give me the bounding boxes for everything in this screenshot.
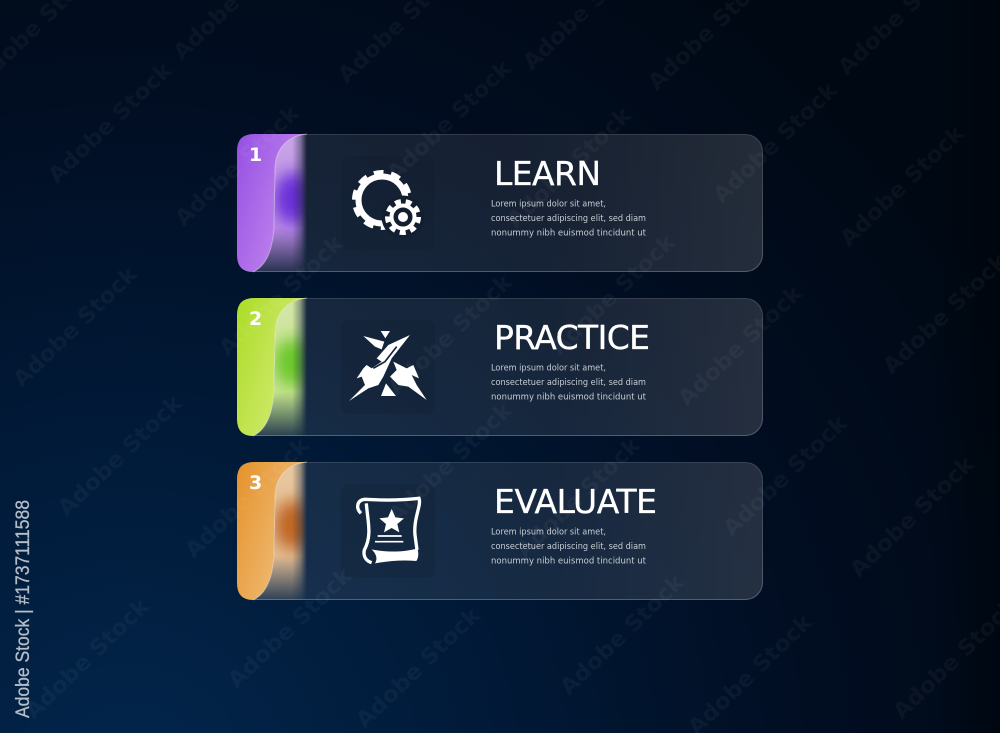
watermarks: Adobe Stock <box>846 451 980 583</box>
watermarks: Adobe Stock <box>21 593 155 725</box>
watermarks: Adobe Stock <box>512 432 646 564</box>
watermarks: Adobe Stock <box>709 77 843 209</box>
watermarks: Adobe Stock <box>383 55 517 187</box>
watermarks: Adobe Stock <box>171 100 305 232</box>
card 3 colour tab <box>237 462 307 600</box>
card 2 glass body <box>238 298 762 436</box>
watermarks: Adobe Stock <box>352 602 486 733</box>
body text 1: nonummy nibh euismod tincidunt ut <box>491 228 646 238</box>
watermarks: Adobe Stock <box>674 280 808 412</box>
heading practice: PRACTICE <box>494 318 650 357</box>
body text 2: Lorem ipsum dolor sit amet, <box>491 364 606 374</box>
card 1 tab edge <box>253 134 307 272</box>
card 2 colour glow <box>254 298 306 436</box>
card 2 tab edge <box>253 298 307 436</box>
card 3 icon tile <box>341 484 435 578</box>
card 1 glass body <box>238 134 762 272</box>
body text 3: nonummy nibh euismod tincidunt ut <box>491 556 646 566</box>
body text 1 <box>491 200 646 238</box>
icon: scroll with star <box>358 498 420 563</box>
number 3: 3 <box>249 472 262 494</box>
body text 1: Lorem ipsum dolor sit amet, <box>491 200 606 210</box>
body text 1: consectetuer adipiscing elit, sed diam <box>491 214 646 224</box>
watermarks: Adobe Stock <box>181 432 315 564</box>
watermarks: Adobe Stock <box>44 57 178 189</box>
number 2: 2 <box>249 308 262 330</box>
number 1: 1 <box>249 144 262 166</box>
body text 3 <box>491 528 646 566</box>
watermarks: Adobe Stock <box>836 120 970 252</box>
watermarks: Adobe Stock <box>384 397 518 529</box>
watermarks: Adobe Stock <box>556 569 690 701</box>
icon: gears <box>355 173 424 238</box>
watermarks: Adobe Stock <box>54 390 188 522</box>
panel: card 3 evaluate <box>237 458 762 604</box>
card 3 colour glow <box>254 462 306 600</box>
card 3 tab edge <box>253 462 307 600</box>
icon: crossed swords <box>349 331 427 401</box>
card 1 colour glow <box>254 134 306 272</box>
watermarks: Adobe Stock <box>719 410 853 542</box>
body text 2: nonummy nibh euismod tincidunt ut <box>491 392 646 402</box>
panel: card 2 practice <box>237 294 762 440</box>
watermarks: Adobe Stock <box>547 229 681 361</box>
card 3 glass body <box>238 462 762 600</box>
watermarks: Adobe Stock <box>503 102 637 234</box>
stock id label: Adobe Stock | #1737111588 <box>13 500 34 718</box>
heading evaluate: EVALUATE <box>494 482 657 521</box>
body text 2: consectetuer adipiscing elit, sed diam <box>491 378 646 388</box>
body text 3: Lorem ipsum dolor sit amet, <box>491 528 606 538</box>
body text 3: consectetuer adipiscing elit, sed diam <box>491 542 646 552</box>
card 1 colour tab <box>237 134 307 272</box>
body text 2 <box>491 364 646 402</box>
watermarks: Adobe Stock <box>224 562 358 694</box>
card 2 colour tab <box>237 298 307 436</box>
card 1 icon tile <box>341 156 435 250</box>
card 2 icon tile <box>341 320 435 414</box>
panel: card 1 learn <box>237 130 762 276</box>
watermarks: Adobe Stock <box>9 261 143 393</box>
heading learn: LEARN <box>494 154 601 193</box>
watermarks: Adobe Stock <box>215 230 349 362</box>
watermarks: Adobe Stock <box>384 269 518 401</box>
